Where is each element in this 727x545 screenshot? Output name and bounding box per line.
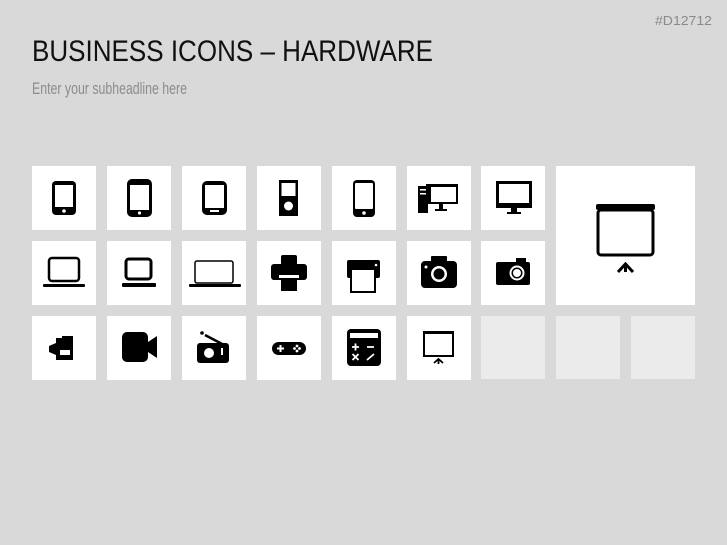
tile: printer 2 — [332, 241, 396, 305]
tile: radio — [182, 316, 246, 380]
tile: desktop pc — [407, 166, 471, 230]
tile: video camera — [107, 316, 171, 380]
tile: camcorder — [32, 316, 96, 380]
tile: phone — [182, 166, 246, 230]
tile: laptop wide — [182, 241, 246, 305]
subheadline: Enter your subheadline here — [32, 79, 187, 98]
tag code: #D12712 — [655, 13, 712, 28]
tile: laptop 1 — [32, 241, 96, 305]
tile: gamepad — [257, 316, 321, 380]
tile: calculator — [332, 316, 396, 380]
tile: camera slr — [407, 241, 471, 305]
tile: presentation screen — [407, 316, 471, 380]
tile: music player — [257, 166, 321, 230]
title: BUSINESS ICONS – HARDWARE — [32, 35, 433, 68]
tile: laptop 2 — [107, 241, 171, 305]
tile: smartphone — [107, 166, 171, 230]
tile: tablet — [32, 166, 96, 230]
tile: printer — [257, 241, 321, 305]
empty tiles — [481, 316, 695, 379]
tile: presentation screen large — [556, 166, 695, 305]
tile: mobile — [332, 166, 396, 230]
tile: compact camera — [481, 241, 545, 305]
tile: monitor — [481, 166, 545, 230]
